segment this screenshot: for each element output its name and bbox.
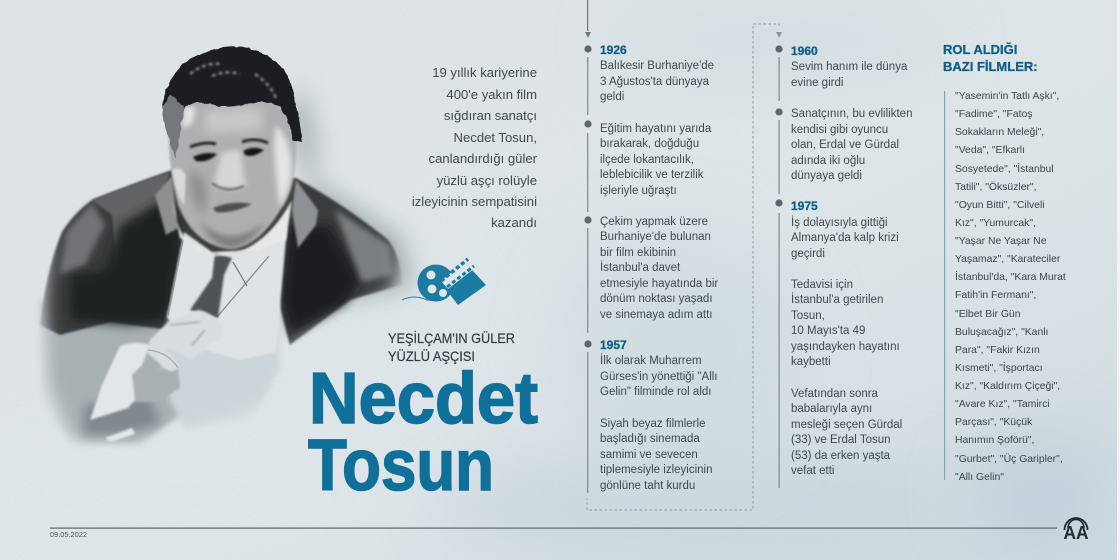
hair highlights: [190, 64, 276, 98]
timeline line and dots: [584, 45, 592, 493]
entry: 1975 death: Tosun,: [791, 310, 825, 322]
entry: 1957 first film: İlk olarak Muharrem: [600, 354, 702, 367]
entry: 1926 birth: 1926: [600, 43, 627, 57]
heading: films: ROL ALDIĞI: [943, 42, 1017, 57]
entry: film crew: ve sinemaya adım attı: [600, 309, 712, 321]
entry: 1975 death: babalarıyla aynı: [791, 403, 872, 415]
entry: sons: [791, 108, 912, 182]
intro paragraph: yüzlü aşçı rolüyle: [437, 173, 537, 188]
hand: [146, 310, 224, 371]
timeline line and dots: [775, 45, 783, 488]
cuff: [90, 343, 150, 420]
heading: films: BAZI FİLMLER:: [943, 59, 1038, 74]
timeline: left column: [584, 0, 718, 493]
film list: Hanımın Şoförü",: [955, 435, 1034, 446]
dashed connector between timeline columns: [587, 24, 779, 510]
entry: film crew: Çekim yapmak üzere: [600, 216, 708, 228]
logo: AA: AA: [1064, 523, 1088, 543]
lower shirt: [160, 300, 280, 430]
intro paragraph: 400'e yakın film: [446, 87, 537, 102]
entry: 1926 birth: geldi: [600, 91, 624, 103]
film list: "Fadime", "Fatoş: [955, 109, 1032, 120]
intro paragraph: canlandırdığı güler: [429, 151, 538, 166]
date: 09.05.2022: [50, 530, 87, 539]
film list: [944, 91, 1066, 483]
film list: Parçası", "Küçük: [955, 417, 1033, 428]
film list: Kız", "Kaldırım Çiçeği",: [955, 381, 1060, 392]
intro paragraph: kazandı: [491, 215, 537, 230]
brows: [190, 140, 268, 147]
entry: 1957 first film: Gelin" filminde rol aldı: [600, 386, 711, 398]
film list: Sokakların Meleği",: [955, 127, 1044, 138]
entry: 1960 marriage: 1960: [791, 44, 818, 58]
heading: films: [943, 42, 1038, 74]
subtitle: [388, 331, 515, 364]
entry: film crew: [600, 216, 718, 321]
entry: 1957 first film: Gürses'in yönettiği "Allı: [600, 371, 718, 383]
soft shadow behind head and shoulders: [290, 85, 412, 300]
entry: 1975 death: (53) da erken yaşta: [791, 450, 891, 462]
film list: Sosyetede", "İstanbul: [955, 162, 1054, 175]
entry: 1975 death: (33) ve Erdal Tosun: [791, 434, 891, 446]
film list: Buluşacağız", "Kanlı: [955, 327, 1048, 338]
arrow from connector: [776, 32, 782, 38]
entry: sons: Sanatçının, bu evlilikten: [791, 108, 912, 120]
entry: 1957 first film: başladığı sinemada: [600, 433, 700, 445]
entry: 1926 birth: 3 Ağustos'ta dünyaya: [600, 76, 710, 88]
film list: "Oyun Bitti", "Cilveli: [955, 200, 1045, 211]
entry: education: işleriyle uğraştı: [600, 185, 677, 197]
title: Necdet: [309, 359, 538, 439]
entry: 1957 first film: [600, 338, 718, 492]
intro paragraph: izleyicinin sempatisini: [412, 194, 537, 209]
entry: 1975 death: İş dolayısıyla gittiği: [791, 216, 888, 229]
entry: film crew: İstanbul'a davet: [600, 261, 681, 274]
entry: sons: olan, Erdal ve Gürdal: [791, 139, 899, 151]
entry: film crew: dönüm noktası yaşadı: [600, 293, 713, 305]
intro paragraph: Necdet Tosun,: [454, 130, 537, 145]
entry: 1975 death: Almanya'da kalp krizi: [791, 232, 899, 244]
film list: "Avare Kız", "Tamirci: [955, 399, 1050, 410]
timeline: right column: [775, 32, 912, 488]
entry: 1926 birth: [600, 43, 714, 103]
eyes: [193, 148, 264, 161]
body fading into background: [37, 170, 402, 445]
title: [308, 359, 538, 506]
film list: Para", "Fakir Kızın: [955, 345, 1040, 356]
intro paragraph: 19 yıllık kariyerine: [432, 65, 537, 80]
entry: 1957 first film: gönlüne taht kurdu: [600, 480, 695, 492]
film list: "Elbet Bir Gün: [955, 309, 1021, 320]
lapels: [155, 176, 178, 235]
film list: "Yaşar Ne Yaşar Ne: [955, 236, 1047, 247]
head: [162, 47, 302, 256]
icon: film reel and clapperboard: [402, 259, 486, 305]
entry: film crew: etmesiyle hayatında bir: [600, 278, 718, 290]
entry: 1957 first film: samimi ve sevecen: [600, 449, 698, 461]
lower sleeve fabric and palm: [133, 368, 180, 402]
entry: 1960 marriage: [791, 44, 908, 89]
film list: "Gurbet", "Üç Garipler",: [955, 453, 1063, 465]
subtitle: YEŞİLÇAM'IN GÜLER: [388, 331, 515, 346]
arrow into timeline: [585, 0, 591, 38]
intro paragraph: sığdıran sanatçı: [444, 108, 537, 123]
shirt: [167, 228, 287, 360]
film list: Yaşamaz", "Karateciler: [955, 254, 1061, 265]
entry: education: [600, 123, 712, 197]
entry: 1975 death: Tedavisi için: [791, 279, 853, 291]
entry: 1960 marriage: evine girdi: [791, 77, 843, 89]
portrait photo of Necdet Tosun: [37, 47, 412, 445]
subtitle: YÜZLÜ AŞÇISI: [388, 349, 475, 364]
entry: film crew: bir film ekibinin: [600, 247, 676, 259]
entry: 1975 death: 10 Mayıs'ta 49: [791, 325, 865, 337]
entry: sons: dünyaya geldi: [791, 170, 862, 182]
lower sleeve: [38, 300, 180, 446]
nose: [214, 150, 246, 189]
film list: Kısmeti", "İşportacı: [955, 361, 1043, 374]
entry: 1957 first film: tiplemesiyle izleyicinin: [600, 464, 712, 476]
film list: "Veda", "Efkarlı: [955, 145, 1025, 156]
dark shadow areas in jacket: [70, 195, 182, 325]
entry: 1975 death: İstanbul'a getirilen: [791, 293, 883, 306]
entry: 1975 death: kaybetti: [791, 356, 831, 368]
entry: education: Eğitim hayatını yarıda: [600, 123, 712, 135]
entry: education: leblebicilik ve terzilik: [600, 169, 704, 181]
lower left cuff highlight: [105, 428, 135, 442]
entry: education: bırakarak, doğduğu: [600, 138, 699, 150]
entry: 1975 death: Vefatından sonra: [791, 388, 879, 400]
entry: sons: adında iki oğlu: [791, 155, 865, 167]
neck and collar: [172, 200, 292, 256]
film list: "Yasemin'in Tatlı Aşkı",: [955, 91, 1059, 102]
footer rule: [50, 528, 1057, 529]
entry: 1957 first film: Siyah beyaz filmlerle: [600, 418, 705, 430]
entry: sons: kendisi gibi oyuncu: [791, 124, 888, 136]
film list: Fatih'in Fermanı",: [955, 290, 1036, 301]
face: [168, 92, 296, 249]
hair: [162, 47, 302, 150]
entry: 1957 first film: 1957: [600, 338, 627, 352]
entry: film crew: Burhaniye'de bulunan: [600, 231, 711, 243]
entry: 1975 death: geçirdi: [791, 248, 825, 260]
tie: [190, 253, 232, 318]
entry: 1975 death: [791, 199, 902, 477]
entry: 1975 death: vefat etti: [791, 465, 834, 477]
jacket: [40, 170, 402, 345]
entry: 1975 death: yaşındayken hayatını: [791, 341, 900, 353]
entry: 1975 death: mesleği seçen Gürdal: [791, 419, 902, 431]
entry: education: ilçede lokantacılık,: [600, 154, 694, 166]
film list: İstanbul'da, "Kara Murat: [955, 270, 1066, 283]
film list: Kız", "Yumurcak",: [955, 218, 1036, 229]
entry: 1975 death: 1975: [791, 199, 818, 213]
title: Tosun: [308, 426, 494, 506]
intro paragraph: [412, 65, 538, 230]
entry: 1960 marriage: Sevim hanım ile dünya: [791, 61, 908, 73]
entry: 1926 birth: Balıkesir Burhaniye'de: [600, 60, 714, 72]
film list: "Allı Gelin": [955, 472, 1004, 483]
film list: Tatili", "Öksüzler",: [955, 181, 1037, 193]
mouth: [213, 203, 252, 212]
